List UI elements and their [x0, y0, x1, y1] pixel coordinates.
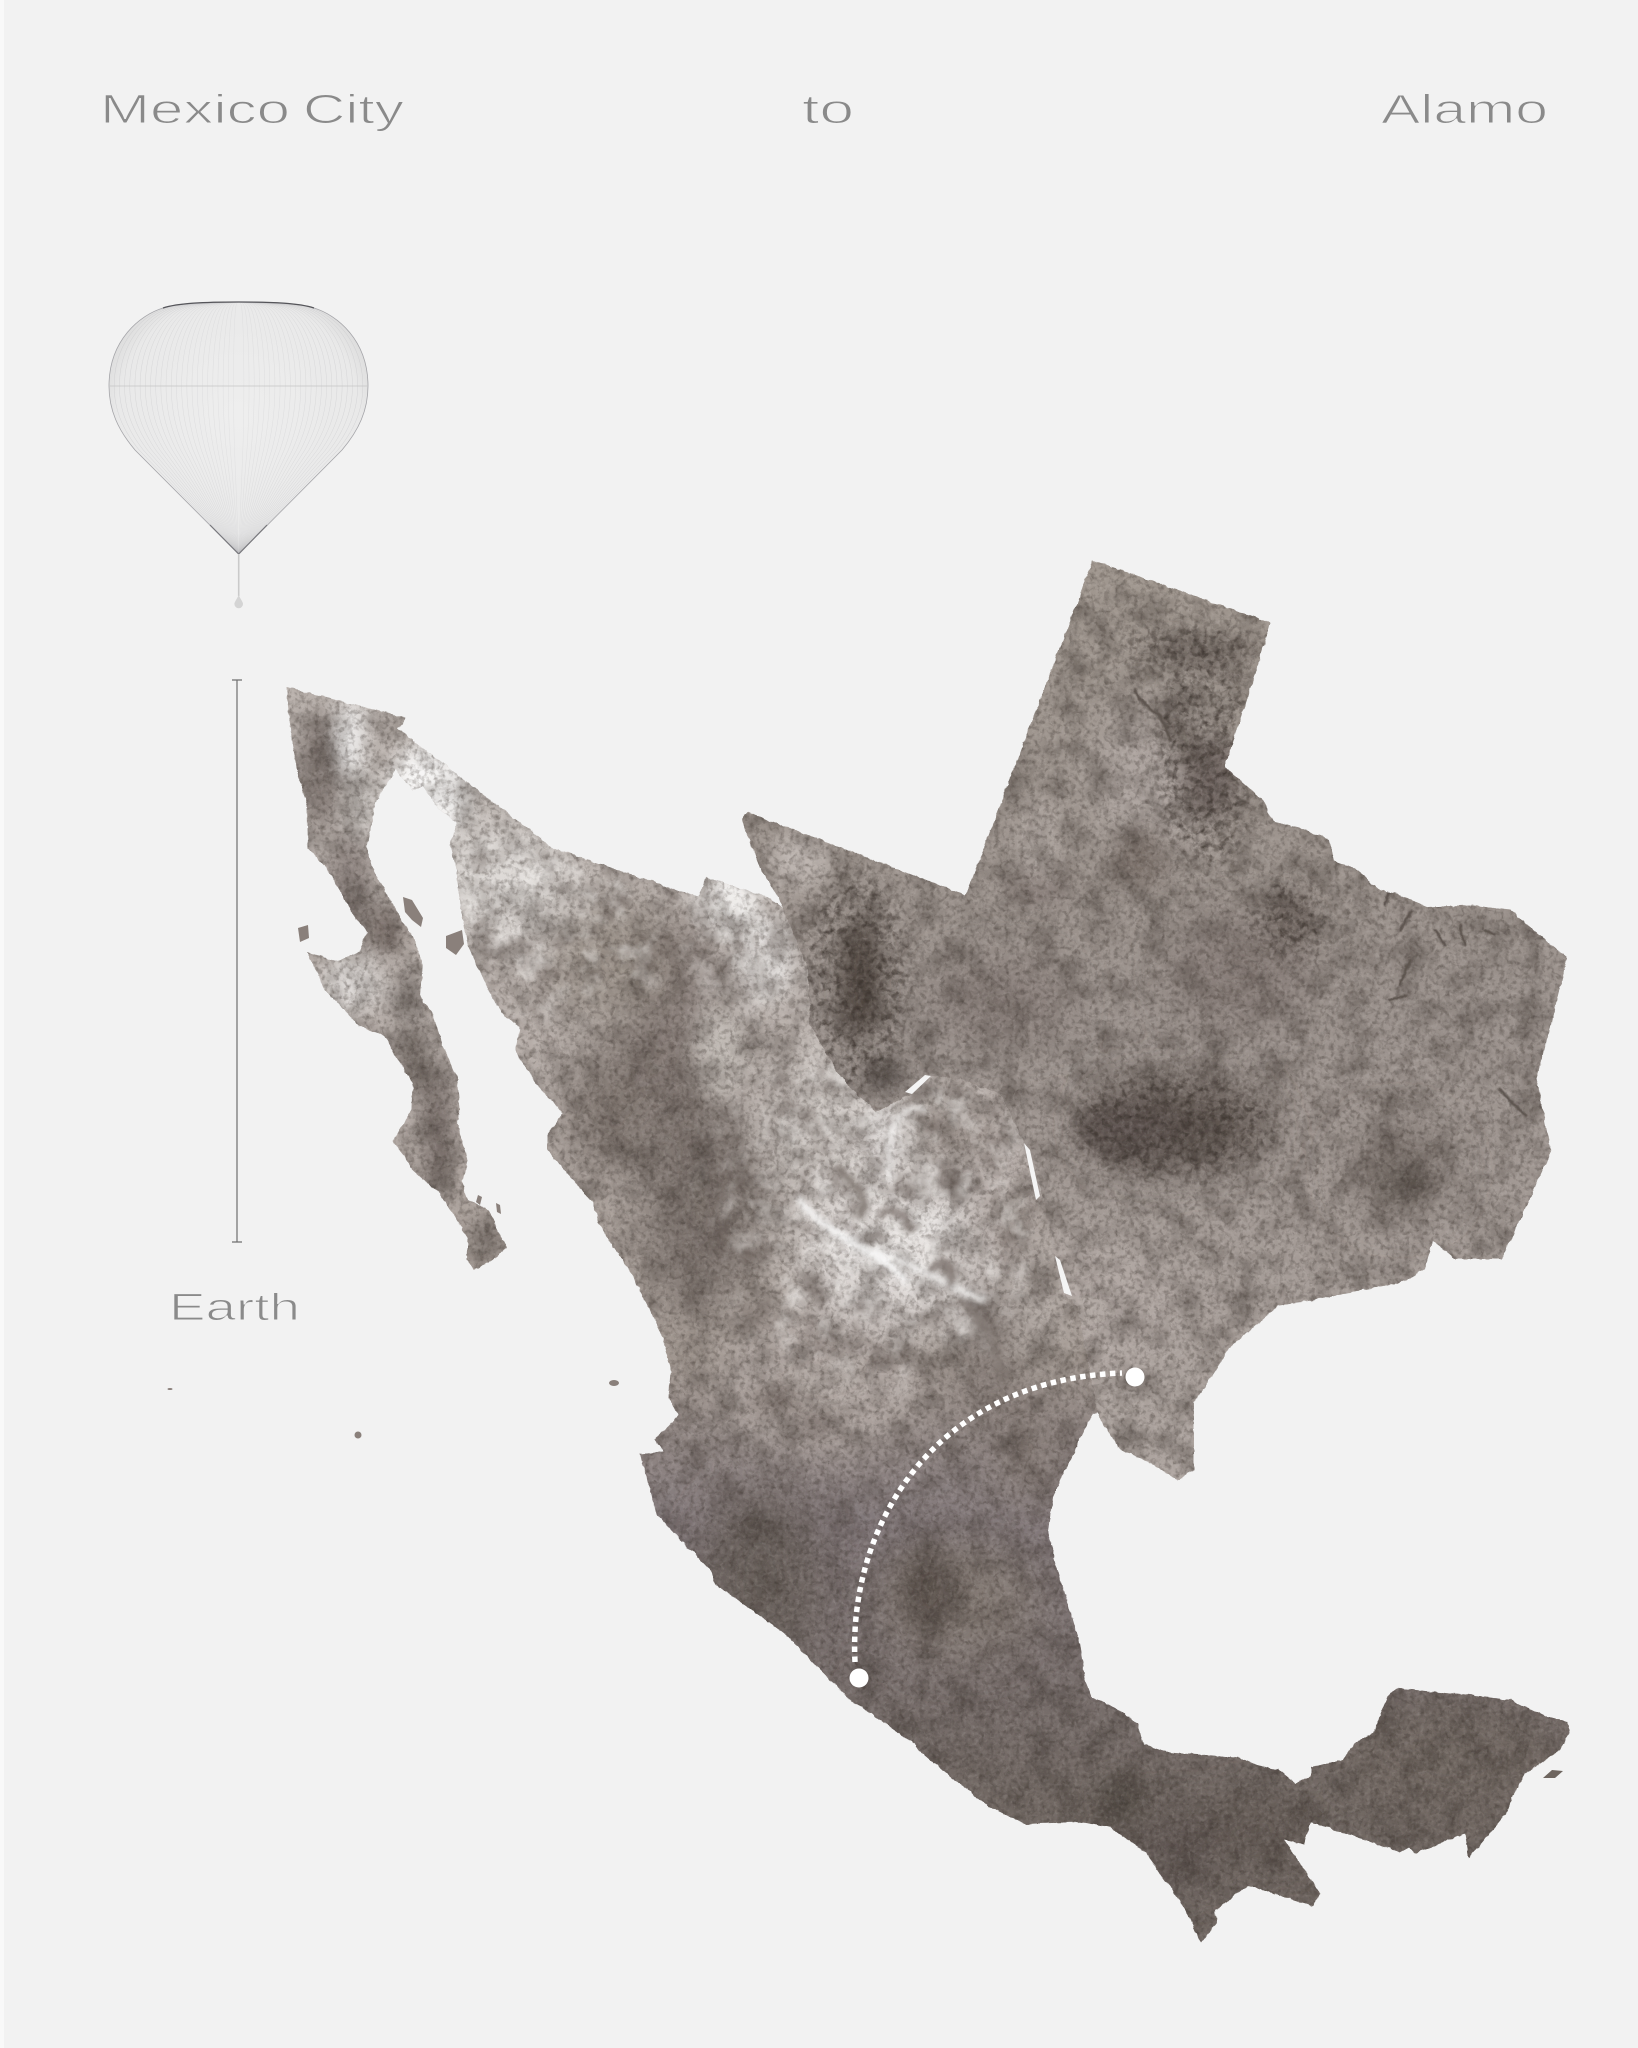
title: Alamo: Alamo [1381, 86, 1548, 132]
marker: Mexico City [850, 1668, 868, 1688]
map: Mexico [280, 680, 1580, 1960]
marker: Alamo [1126, 1368, 1144, 1386]
label: Earth: Earth [169, 1287, 300, 1329]
title: Mexico City: City [303, 86, 405, 132]
map: offshore islands [168, 897, 1563, 1778]
title: Mexico City [100, 86, 405, 132]
scale bar [232, 680, 242, 1242]
route: dotted arc from Mexico City to Alamo [850, 1368, 1144, 1688]
title: Mexico City: Mexico [100, 86, 290, 132]
icon: high-altitude balloon [109, 302, 368, 608]
Rio Grande gaps [905, 1075, 1072, 1296]
map: Texas and Trans-Pecos [740, 555, 1570, 1485]
title: to: to [802, 86, 854, 132]
